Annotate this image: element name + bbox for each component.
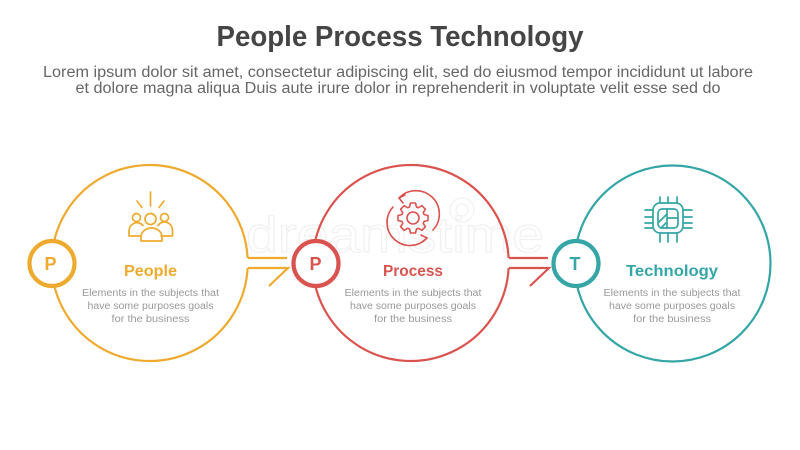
arrow: process to technology (509, 258, 549, 286)
people badge: P (44, 254, 57, 274)
technology badge: T (570, 254, 580, 274)
title: People Process Technology (216, 21, 584, 53)
arrow: people to process (248, 258, 288, 286)
people outline circle (52, 165, 248, 361)
people description (82, 288, 219, 325)
people description: have some purposes goals (88, 301, 214, 312)
process description: Elements in the subjects that (344, 288, 482, 299)
people description: for the business (112, 314, 190, 325)
intro text block: Lorem ipsum dolor sit amet, consectetur adipiscing elit, sed do eiusmod tempor incididunt ut labore (43, 64, 753, 81)
panel: technology (554, 166, 770, 362)
technology badge (554, 241, 598, 286)
process badge: P (309, 254, 322, 274)
technology description (604, 288, 741, 325)
process outline circle (313, 165, 509, 361)
people heading: People (124, 263, 177, 280)
process description: for the business (374, 314, 452, 325)
process badge (294, 241, 338, 286)
technology heading: Technology (626, 263, 718, 280)
intro text block (43, 64, 753, 97)
watermark: dreamstime (246, 207, 544, 263)
technology description: have some purposes goals (609, 301, 735, 312)
technology description: Elements in the subjects that (604, 288, 741, 299)
process description (344, 288, 482, 325)
people badge (30, 241, 74, 286)
icon: technology chip (645, 197, 692, 242)
process heading: Process (383, 263, 443, 280)
panel: process (294, 165, 549, 361)
process description: have some purposes goals (350, 301, 476, 312)
icon: people (129, 192, 173, 241)
intro text block: et dolore magna aliqua Duis aute irure dolor in reprehenderit in voluptate velit esse sed do (76, 80, 720, 97)
panel: people (30, 165, 288, 361)
icon: process gear (387, 191, 439, 246)
technology description: for the business (633, 314, 711, 325)
technology outline circle (574, 166, 770, 362)
people description: Elements in the subjects that (82, 288, 219, 299)
